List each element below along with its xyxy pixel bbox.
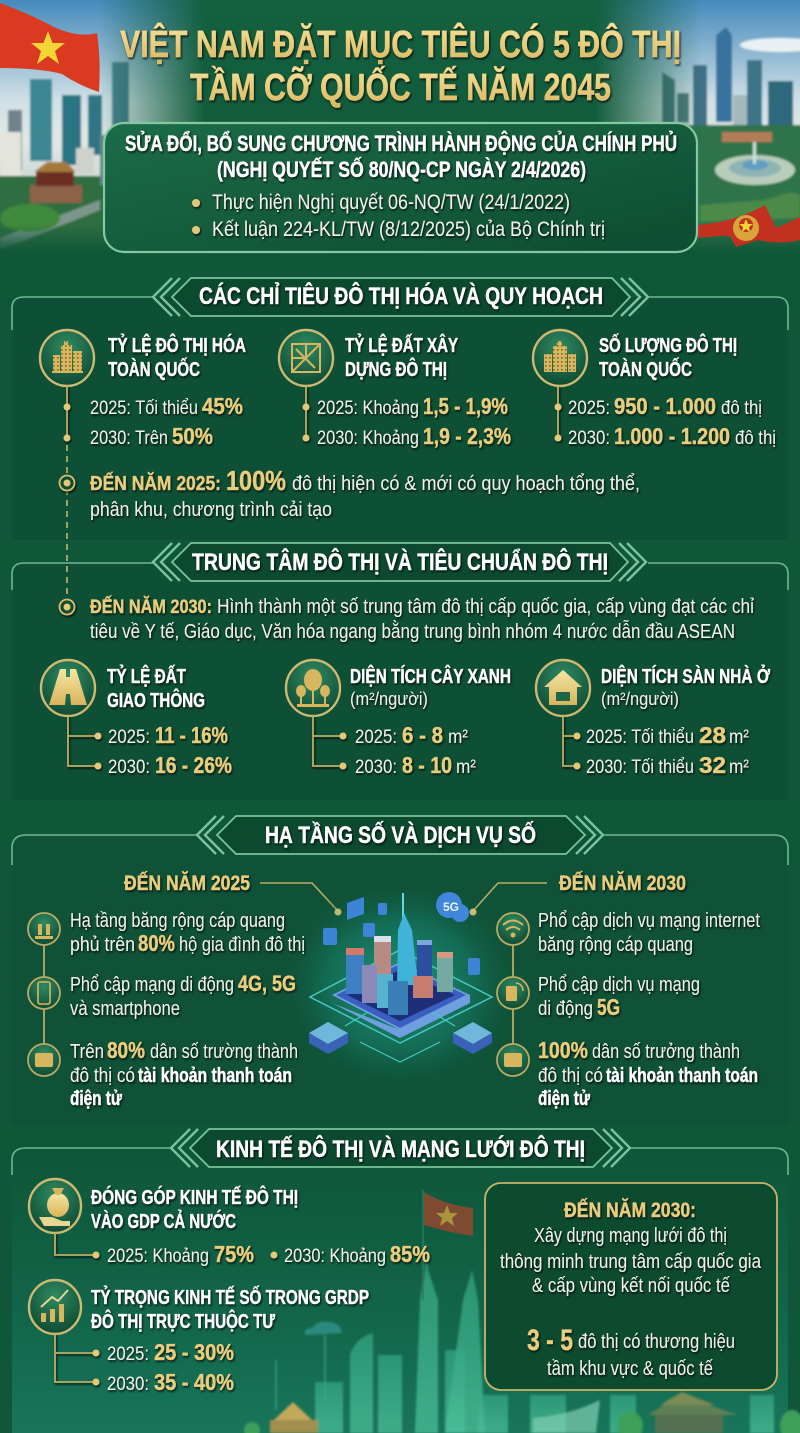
heading: section 3 banner — [197, 816, 603, 854]
item: payment accounts: 100% — [538, 1037, 588, 1063]
programme heading — [125, 131, 677, 182]
heading: section 1 banner — [153, 278, 648, 316]
indicator heading: ĐÔ THỊ TRỰC THUỘC TƯ — [91, 1309, 275, 1333]
callout: by 2025: ĐẾN NĂM 2025: — [90, 472, 221, 495]
indicator values: m² — [448, 727, 468, 748]
indicator heading — [91, 1185, 298, 1233]
item: fibre broadband — [28, 910, 305, 956]
icon: flag on pole — [423, 1190, 473, 1300]
callout box: by 2030 network — [485, 1183, 777, 1390]
item: 5G network: Phổ cập dịch vụ mạng — [538, 974, 700, 996]
indicator heading — [108, 333, 246, 381]
indicator values: 8 - 10 — [402, 752, 452, 778]
photo: right skyline — [590, 0, 800, 257]
photo: left skyline — [0, 0, 210, 257]
indicator heading: TOÀN QUỐC — [108, 357, 200, 381]
programme bullets — [192, 191, 605, 241]
item: payment accounts: tài khoản thanh toán — [138, 1065, 292, 1087]
indicator values: 50% — [172, 423, 213, 449]
indicator heading — [107, 664, 205, 712]
list: targets by 2030 — [497, 910, 760, 1110]
column: green space — [286, 660, 511, 778]
item: fibre broadband: Hạ tầng băng rộng cáp quang — [70, 910, 285, 932]
heading: section 3 banner: HẠ TẦNG SỐ VÀ DỊCH VỤ SỐ — [265, 821, 536, 849]
panel: section 2 — [12, 563, 788, 800]
indicator values — [64, 386, 243, 449]
indicator values: 2025: — [107, 1344, 149, 1365]
heading: by 2030 with connector — [470, 872, 686, 916]
callout heading: ĐẾN NĂM 2030: — [564, 1199, 696, 1222]
indicator heading: TỶ LỆ ĐẤT XÂY — [345, 333, 458, 357]
heading: section 1 banner: CÁC CHỈ TIÊU ĐÔ THỊ HÓA VÀ QUY HOẠCH — [199, 281, 603, 310]
indicator heading: GIAO THÔNG — [107, 688, 205, 712]
icon: Vietnam flag — [0, 3, 100, 92]
indicator values: đô thị — [735, 428, 776, 449]
heading: section 4 banner: KINH TẾ ĐÔ THỊ VÀ MẠNG LƯỚI ĐÔ THỊ — [216, 1135, 585, 1163]
indicator values — [55, 1233, 430, 1267]
indicator values: 950 - 1.000 — [614, 393, 716, 419]
indicator values: m² — [729, 757, 749, 778]
indicator values: 6 - 8 — [402, 722, 443, 748]
indicator values: 45% — [202, 393, 243, 419]
column: urbanisation rate — [40, 330, 246, 449]
callout text: Xây dựng mạng lưới đô thị — [534, 1225, 727, 1247]
indicator values: 2025: Tối thiểu — [586, 727, 694, 748]
indicator heading: (m²/người) — [601, 689, 679, 709]
programme heading: (NGHỊ QUYẾT SỐ 80/NQ-CP NGÀY 2/4/2026) — [217, 156, 586, 182]
indicator heading — [91, 1285, 369, 1333]
indicator values: 2030: — [568, 428, 610, 449]
bottom skyline illustration — [244, 1240, 800, 1433]
item: payment accounts: đô thị có — [70, 1065, 135, 1087]
callout: by 2025: đô thị hiện có & mới có quy hoạch tổng thể, — [292, 473, 640, 495]
indicator values: 2030: Trên — [90, 428, 168, 449]
item: fibre broadband: 80% — [138, 930, 175, 956]
indicator values: 2025: — [568, 398, 610, 419]
item: fibre broadband: phủ trên — [70, 934, 135, 956]
item: mobile network — [28, 971, 296, 1020]
icon: house — [536, 660, 590, 716]
callout: by 2025 — [60, 465, 640, 521]
indicator values: 2030: — [108, 757, 150, 778]
callout text: đô thị có thương hiệu — [578, 1331, 735, 1353]
callout: by 2030: ĐẾN NĂM 2030: — [90, 596, 212, 618]
indicator values: đô thị — [721, 398, 762, 419]
title: TẦM CỠ QUỐC TẾ NĂM 2045 — [190, 64, 611, 109]
callout text — [500, 1225, 762, 1380]
indicator values: 75% — [214, 1241, 254, 1267]
icon: ribbon with national emblem — [698, 205, 800, 247]
indicator values: 2030: Khoảng — [317, 428, 419, 449]
indicator heading: (m²/người) — [350, 689, 428, 709]
icon: money bag — [29, 1179, 81, 1233]
callout text: 3 - 5 — [527, 1324, 573, 1357]
list: targets by 2025 — [28, 910, 305, 1110]
indicator heading: TOÀN QUỐC — [599, 357, 692, 381]
item: payment accounts — [28, 1037, 298, 1110]
indicator values: 32 — [699, 752, 726, 778]
indicator heading — [599, 333, 737, 381]
item: payment accounts: điện tử — [70, 1088, 122, 1110]
indicator values — [55, 1334, 234, 1395]
indicator: digital economy share of GRDP — [29, 1280, 369, 1395]
item: payment accounts: dân số trưởng thành — [592, 1041, 740, 1063]
item: 5G network: 5G — [597, 994, 620, 1020]
indicator values: 2025: Tối thiểu — [90, 398, 198, 419]
callout text: tầm khu vực & quốc tế — [547, 1358, 713, 1380]
callout: by 2025: phân khu, chương trình cải tạo — [90, 499, 332, 521]
indicator values: 16 - 26% — [155, 752, 232, 778]
indicator heading: TỶ TRỌNG KINH TẾ SỐ TRONG GRDP — [91, 1285, 369, 1309]
item: 5G network — [497, 974, 700, 1020]
callout: by 2025: 100% — [226, 465, 286, 496]
item: fibre broadband: hộ gia đình đô thị — [179, 934, 305, 956]
indicator values: 1.000 - 1.200 — [614, 423, 730, 449]
panel: government action programme — [104, 123, 697, 252]
item: payment accounts: Trên — [70, 1041, 104, 1063]
item: mobile network: 4G, 5G — [238, 971, 296, 996]
heading: section 2 banner: TRUNG TÂM ĐÔ THỊ VÀ TIÊU CHUẨN ĐÔ THỊ — [192, 548, 608, 576]
indicator values: m² — [729, 727, 749, 748]
programme bullets: Kết luận 224-KL/TW (8/12/2025) của Bộ Chính trị — [212, 218, 605, 241]
indicator values — [313, 716, 476, 778]
heading: by 2025 with connector — [124, 872, 342, 916]
indicator heading — [601, 664, 771, 709]
column: number of urban areas — [533, 330, 776, 449]
icon: office block — [533, 330, 587, 386]
indicator values: 1,9 - 2,3% — [423, 423, 511, 449]
item: payment accounts: tài khoản thanh toán — [606, 1065, 758, 1087]
indicator: urban economy share of GDP — [29, 1179, 430, 1267]
indicator heading: ĐÓNG GÓP KINH TẾ ĐÔ THỊ — [91, 1185, 298, 1209]
panel: section 4 — [12, 1148, 788, 1433]
heading: by 2030 with connector: ĐẾN NĂM 2030 — [559, 872, 686, 895]
icon: trees — [286, 660, 340, 716]
column: construction land rate — [279, 330, 511, 449]
column: transport land — [41, 660, 232, 778]
callout text: & cấp vùng kết nối quốc tế — [532, 1275, 730, 1297]
indicator heading: VÀO GDP CẢ NƯỚC — [91, 1209, 236, 1233]
indicator values: 2025: Khoảng — [107, 1246, 209, 1267]
icon: city buildings — [40, 330, 94, 386]
programme bullets: Thực hiện Nghị quyết 06-NQ/TW (24/1/2022) — [212, 191, 570, 214]
indicator values: 2030: Tối thiểu — [586, 757, 694, 778]
indicator heading: SỐ LƯỢNG ĐÔ THỊ — [599, 333, 737, 357]
indicator heading: DIỆN TÍCH CÂY XANH — [350, 664, 511, 688]
indicator values — [563, 716, 749, 778]
panel: section 3 — [12, 835, 788, 1125]
item: mobile network: và smartphone — [70, 998, 180, 1020]
title — [120, 21, 681, 109]
illustration: smart city on digital platform — [275, 875, 525, 1095]
indicator heading — [345, 333, 458, 381]
heading: by 2025 with connector: ĐẾN NĂM 2025 — [124, 872, 250, 895]
heading: section 2 banner — [153, 543, 646, 581]
callout: by 2030 — [60, 596, 754, 643]
item: internet broadband: băng rộng cáp quang — [538, 934, 693, 956]
indicator values: m² — [456, 757, 476, 778]
icon: road — [41, 660, 95, 716]
indicator values: 85% — [390, 1241, 430, 1267]
indicator values: 2030: — [355, 757, 397, 778]
indicator values — [68, 716, 232, 778]
indicator heading: TỶ LỆ ĐÔ THỊ HÓA — [108, 333, 246, 357]
indicator heading: DỰNG ĐÔ THỊ — [345, 357, 447, 381]
item: payment accounts — [497, 1037, 758, 1110]
indicator values: 2025: — [355, 727, 397, 748]
indicator heading — [350, 664, 511, 709]
indicator values: 25 - 30% — [154, 1339, 234, 1365]
panel: section 1 — [12, 297, 788, 540]
callout text: thông minh trung tâm cấp quốc gia — [500, 1251, 762, 1273]
indicator values: 2025: — [108, 727, 150, 748]
item: payment accounts: đô thị có — [538, 1065, 603, 1087]
item: payment accounts: dân số trường thành — [150, 1041, 298, 1063]
indicator values: 1,5 - 1,9% — [423, 393, 508, 419]
icon: urban plan — [279, 330, 333, 386]
indicator values — [302, 386, 511, 449]
item: 5G network: di động — [538, 998, 593, 1020]
item: payment accounts: 80% — [107, 1037, 145, 1063]
indicator values — [554, 386, 776, 449]
illustration: smart city on digital platform: 5G — [443, 900, 459, 914]
column: housing floor area — [536, 660, 771, 778]
dashed timeline connector — [66, 445, 68, 600]
indicator values: 2030: Khoảng — [284, 1246, 386, 1267]
indicator values: 28 — [699, 722, 726, 748]
icon: rising chart — [29, 1280, 81, 1334]
indicator heading: TỶ LỆ ĐẤT — [107, 664, 186, 688]
heading: section 4 banner — [171, 1129, 630, 1167]
item: payment accounts: điện tử — [538, 1088, 590, 1110]
item: internet broadband — [497, 910, 760, 956]
indicator values: 2025: Khoảng — [317, 398, 419, 419]
indicator values: 2030: — [107, 1374, 149, 1395]
indicator values: 11 - 16% — [155, 722, 228, 748]
indicator values: 35 - 40% — [154, 1369, 234, 1395]
item: mobile network: Phổ cập mạng di động — [70, 974, 234, 996]
